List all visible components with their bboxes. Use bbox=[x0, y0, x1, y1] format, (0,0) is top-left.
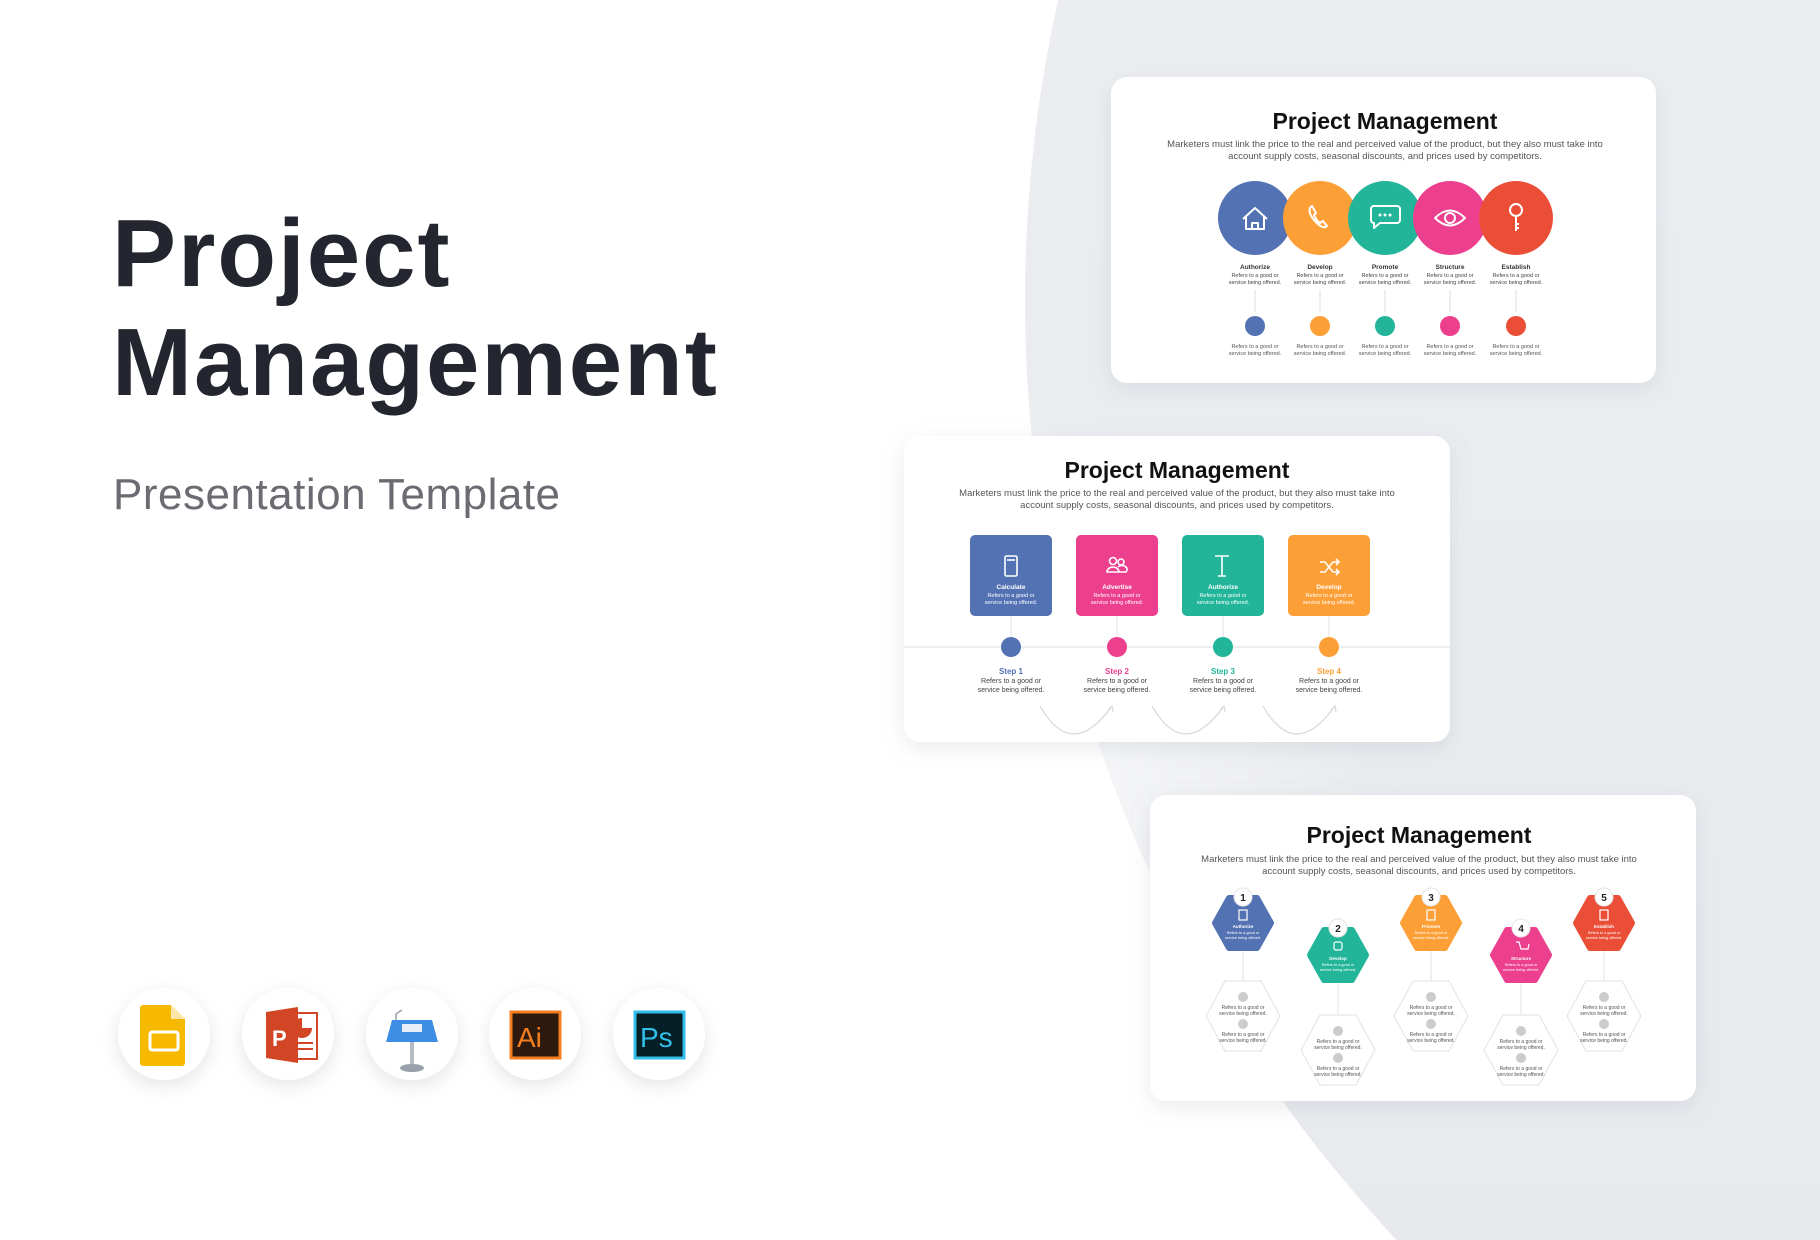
hex icons and labels: Establish bbox=[1594, 924, 1614, 929]
outline hex contents: service being offered. bbox=[1407, 1011, 1455, 1017]
slide 3 description: Marketers must link the price to the real and perceived value of the product, but they also must take into bbox=[1201, 854, 1637, 865]
main title: Management bbox=[112, 309, 719, 416]
slide 1 heading: Project Management bbox=[1273, 108, 1498, 134]
outline hex contents: service being offered. bbox=[1219, 1011, 1267, 1017]
step boxes: Refers to a good or bbox=[1305, 593, 1353, 599]
number badges: 2 bbox=[1335, 924, 1341, 935]
hex icons and labels: Refers to a good or bbox=[1227, 931, 1260, 935]
outline hex contents: Refers to a good or bbox=[1583, 1032, 1626, 1038]
step boxes: Authorize bbox=[1208, 584, 1238, 591]
step labels: service being offered. bbox=[1084, 687, 1150, 694]
step labels: service being offered. bbox=[1296, 687, 1362, 694]
outline hex contents bbox=[1219, 992, 1628, 1078]
hex icons and labels: service being offered. bbox=[1320, 968, 1356, 972]
step boxes: Refers to a good or bbox=[1199, 593, 1247, 599]
number badges: 4 bbox=[1518, 924, 1524, 935]
step labels: Refers to a good or bbox=[1299, 678, 1360, 685]
panel: slide 2 steps bbox=[904, 436, 1450, 742]
arrows: curved connectors bbox=[1040, 706, 1336, 734]
circle labels: Refers to a good or bbox=[1361, 273, 1409, 279]
step boxes: service being offered. bbox=[1303, 600, 1356, 606]
slide 1 description: account supply costs, seasonal discounts, and prices used by competitors. bbox=[1228, 151, 1542, 162]
outline hex contents: Refers to a good or bbox=[1317, 1039, 1360, 1045]
circle labels: Refers to a good or bbox=[1492, 273, 1540, 279]
circle labels: service being offered. bbox=[1294, 280, 1347, 286]
slide 3 description: account supply costs, seasonal discounts, and prices used by competitors. bbox=[1262, 866, 1576, 877]
outline hex contents: service being offered. bbox=[1219, 1038, 1267, 1044]
step labels: Step 1 bbox=[999, 667, 1024, 676]
hex icons and labels: Refers to a good or bbox=[1588, 931, 1621, 935]
circle labels: Structure bbox=[1436, 264, 1465, 271]
outline hex contents: Refers to a good or bbox=[1317, 1066, 1360, 1072]
step labels bbox=[978, 667, 1362, 694]
outline hex contents: service being offered. bbox=[1314, 1072, 1362, 1078]
step labels: Refers to a good or bbox=[1087, 678, 1148, 685]
connector lines and dots: service being offered. bbox=[1490, 351, 1543, 357]
outline hexagons bbox=[1206, 981, 1641, 1085]
step boxes: service being offered. bbox=[985, 600, 1038, 606]
circle labels: Authorize bbox=[1240, 264, 1270, 271]
colored hexagons bbox=[1215, 898, 1632, 980]
hex icons and labels: Structure bbox=[1511, 956, 1531, 961]
step labels: Step 2 bbox=[1105, 667, 1130, 676]
step labels: Refers to a good or bbox=[981, 678, 1042, 685]
panel: slide 1 circles bbox=[1111, 77, 1656, 383]
hex icons and labels bbox=[1225, 910, 1622, 972]
circle labels: service being offered. bbox=[1359, 280, 1412, 286]
step boxes: service being offered. bbox=[1091, 600, 1144, 606]
step labels: Step 4 bbox=[1317, 667, 1342, 676]
circle labels: Establish bbox=[1502, 264, 1530, 271]
step boxes: Calculate bbox=[997, 584, 1026, 591]
circle labels: service being offered. bbox=[1490, 280, 1543, 286]
hex icons and labels: service being offered. bbox=[1413, 936, 1449, 940]
step boxes: Refers to a good or bbox=[987, 593, 1035, 599]
icon: powerpoint bbox=[242, 988, 334, 1080]
step labels: Step 3 bbox=[1211, 667, 1236, 676]
hex icons and labels: Promote bbox=[1422, 924, 1441, 929]
step labels: service being offered. bbox=[1190, 687, 1256, 694]
outline hex contents: service being offered. bbox=[1407, 1038, 1455, 1044]
app icons row bbox=[118, 988, 705, 1080]
connector lines and dots: Refers to a good or bbox=[1361, 344, 1409, 350]
hex icons and labels: Develop bbox=[1329, 956, 1347, 961]
icon: photoshop bbox=[613, 988, 705, 1080]
icon: photoshop: Ps bbox=[640, 1022, 673, 1053]
hex icons and labels: service being offered. bbox=[1225, 936, 1261, 940]
outline hex contents: service being offered. bbox=[1314, 1045, 1362, 1051]
main title bbox=[112, 200, 719, 416]
circle labels: service being offered. bbox=[1424, 280, 1477, 286]
outline hex contents: Refers to a good or bbox=[1222, 1005, 1265, 1011]
main title: Project bbox=[112, 200, 451, 307]
outline hex contents: service being offered. bbox=[1497, 1045, 1545, 1051]
hex icons and labels: service being offered. bbox=[1586, 936, 1622, 940]
panel: slide 3 hexagons bbox=[1150, 795, 1696, 1101]
outline hex contents: Refers to a good or bbox=[1500, 1039, 1543, 1045]
slide 2 description bbox=[959, 488, 1395, 511]
subtitle: Presentation Template bbox=[113, 470, 561, 519]
slide 2 description: Marketers must link the price to the real and perceived value of the product, but they also must take into bbox=[959, 488, 1395, 499]
circle labels bbox=[1229, 264, 1543, 286]
connector lines and dots: Refers to a good or bbox=[1426, 344, 1474, 350]
icon: powerpoint: P bbox=[272, 1026, 287, 1051]
connector lines and dots: service being offered. bbox=[1424, 351, 1477, 357]
outline hex contents: Refers to a good or bbox=[1500, 1066, 1543, 1072]
circle labels: Refers to a good or bbox=[1296, 273, 1344, 279]
connector lines and dots: service being offered. bbox=[1359, 351, 1412, 357]
number badges: 5 bbox=[1601, 893, 1607, 904]
outline hex contents: service being offered. bbox=[1580, 1038, 1628, 1044]
circle labels: Develop bbox=[1307, 264, 1333, 271]
hex icons and labels: service being offered. bbox=[1503, 968, 1539, 972]
step boxes bbox=[970, 535, 1370, 616]
icon: illustrator bbox=[489, 988, 581, 1080]
circle labels: Refers to a good or bbox=[1231, 273, 1279, 279]
connector lines and dots: Refers to a good or bbox=[1296, 344, 1344, 350]
step boxes: Develop bbox=[1316, 584, 1342, 591]
circle labels: service being offered. bbox=[1229, 280, 1282, 286]
step labels: service being offered. bbox=[978, 687, 1044, 694]
outline hex contents: Refers to a good or bbox=[1583, 1005, 1626, 1011]
hex icons and labels: Refers to a good or bbox=[1505, 963, 1538, 967]
connector lines and dots bbox=[1229, 290, 1543, 357]
slide 2 heading: Project Management bbox=[1065, 457, 1290, 483]
circle labels: Promote bbox=[1372, 264, 1399, 271]
circle labels: Refers to a good or bbox=[1426, 273, 1474, 279]
hex icons and labels: Refers to a good or bbox=[1415, 931, 1448, 935]
step labels: Refers to a good or bbox=[1193, 678, 1254, 685]
connector lines and dots: service being offered. bbox=[1294, 351, 1347, 357]
hex icons and labels: Authorize bbox=[1233, 924, 1254, 929]
step dots bbox=[1001, 616, 1339, 657]
outline hex contents: service being offered. bbox=[1580, 1011, 1628, 1017]
hex icons and labels: Refers to a good or bbox=[1322, 963, 1355, 967]
connector lines and dots: Refers to a good or bbox=[1231, 344, 1279, 350]
step boxes: Advertise bbox=[1102, 584, 1132, 591]
outline hex contents: Refers to a good or bbox=[1410, 1005, 1453, 1011]
slide 3 description bbox=[1201, 854, 1637, 877]
timeline line bbox=[904, 646, 1450, 648]
outline hex contents: Refers to a good or bbox=[1222, 1032, 1265, 1038]
slide 1 description bbox=[1167, 139, 1603, 162]
step boxes: Refers to a good or bbox=[1093, 593, 1141, 599]
connector lines and dots: service being offered. bbox=[1229, 351, 1282, 357]
icon: google slides bbox=[118, 988, 210, 1080]
slide 3 heading: Project Management bbox=[1307, 822, 1532, 848]
step boxes: service being offered. bbox=[1197, 600, 1250, 606]
icon: illustrator: Ai bbox=[517, 1022, 542, 1053]
circle steps bbox=[1218, 181, 1553, 255]
slide 1 description: Marketers must link the price to the real and perceived value of the product, but they also must take into bbox=[1167, 139, 1603, 150]
number badges bbox=[1234, 888, 1613, 937]
number badges: 3 bbox=[1428, 893, 1434, 904]
outline hex contents: service being offered. bbox=[1497, 1072, 1545, 1078]
connector lines and dots: Refers to a good or bbox=[1492, 344, 1540, 350]
icon: keynote bbox=[366, 988, 458, 1080]
connector lines bbox=[1243, 950, 1604, 1016]
outline hex contents: Refers to a good or bbox=[1410, 1032, 1453, 1038]
number badges: 1 bbox=[1240, 893, 1246, 904]
slide 2 description: account supply costs, seasonal discounts, and prices used by competitors. bbox=[1020, 500, 1334, 511]
